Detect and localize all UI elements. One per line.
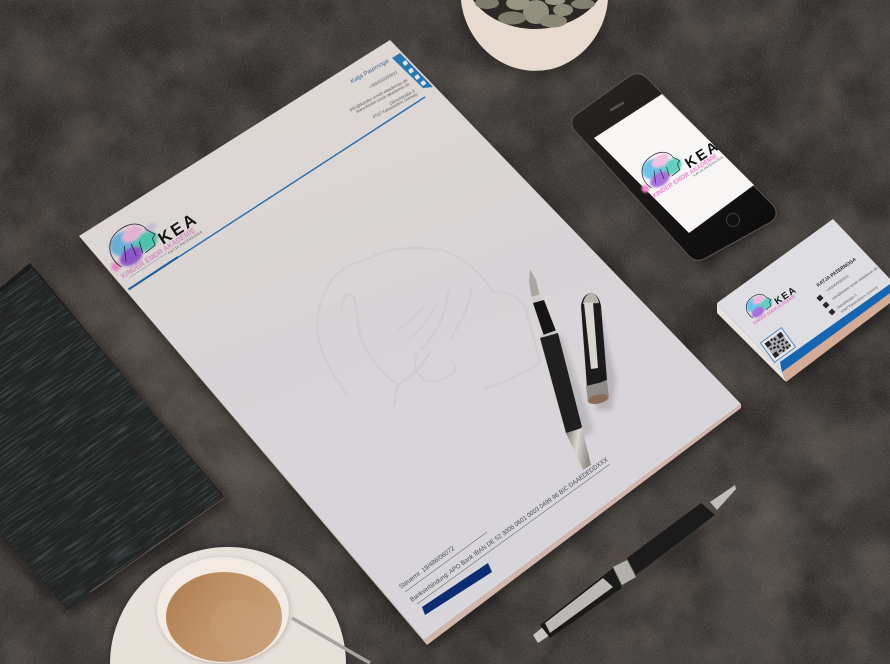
contact text block: [349, 58, 419, 119]
card side edge: [717, 303, 786, 382]
contact text block: +49160/0300021: [368, 69, 399, 90]
footer tax number: [398, 532, 487, 592]
contact text block: Katja Paternoga: [350, 58, 391, 85]
card QR code: [760, 328, 796, 362]
spoon: [292, 618, 370, 663]
lower barrel: [540, 568, 622, 638]
saucer: [108, 544, 348, 664]
black leather notebook: [0, 249, 230, 616]
card logo: [741, 275, 799, 325]
cap metal ring: [586, 381, 609, 404]
card logo KEA: KEA: [773, 285, 798, 307]
logo wordmark KEA: KEA: [155, 210, 199, 248]
paper shadow: [79, 60, 746, 650]
contact text block: info@kinder-emdr-akademie.de: [349, 77, 409, 112]
social tab top right: [392, 53, 433, 88]
card logo head: [742, 289, 776, 321]
card contact icons: [816, 294, 836, 316]
phone logo: [629, 123, 725, 206]
card contact text: info@kinder-emdr-akademie.de: [831, 266, 879, 301]
contact text block: www.kinder-emdr-akademie.de: [355, 81, 411, 114]
card stack salmon edge: [782, 293, 890, 382]
logo name: KINDER EMDR AKADEMIE: [119, 226, 197, 281]
upper barrel: [627, 503, 715, 575]
card contact text: Dieselstraße 3: [836, 293, 858, 310]
plant pot with succulent: [455, 0, 614, 78]
card contact text: 67657 Kaiserslautern, Germany: [840, 285, 879, 314]
card contact text: [816, 257, 879, 314]
ring: [613, 560, 636, 585]
collar ring: [540, 330, 558, 339]
earpiece: [611, 103, 623, 110]
card logo name: KINDER EMDR AKADEMIE: [752, 293, 796, 325]
logo thin underline: [129, 253, 167, 278]
smartphone: [572, 74, 782, 268]
pen cap: [581, 293, 616, 410]
nib: [529, 269, 540, 299]
metal cone: [710, 485, 736, 510]
tip: [533, 627, 550, 643]
card face: [717, 219, 890, 372]
cap clip: [584, 302, 598, 369]
business card stack: [716, 219, 890, 388]
contact text block: 67657 Kaiserslautern, Germany: [372, 91, 419, 119]
logo sub line: KATJA PATERNOGA: [167, 230, 203, 255]
letterhead logo: [96, 192, 204, 286]
barrel: [540, 333, 582, 433]
card contact text: +49160/0300021: [825, 274, 850, 293]
letterhead paper: [79, 40, 746, 650]
silver clip: [545, 578, 613, 633]
paper sheet: [79, 40, 741, 640]
header blue rule: [128, 97, 425, 290]
home button: [726, 214, 740, 226]
watermark: faint head outline: [317, 248, 540, 405]
contact text block: Dieselstraße 3: [389, 88, 416, 106]
phone logo head: [629, 144, 687, 196]
ballpoint pen: [533, 485, 736, 645]
footer navy bar: [422, 563, 492, 615]
phone logo KEA: KEA: [683, 139, 721, 172]
coffee cup: [157, 557, 291, 664]
paper edge: [79, 236, 741, 645]
fountain pen: [529, 269, 594, 470]
phone logo sub line: KATJA PATERNOGA: [693, 155, 725, 178]
grip section: [533, 300, 556, 336]
footer tax number: Steuernr. 19/486/06072: [398, 545, 456, 591]
metal end: [566, 428, 591, 470]
card contact text: KATJA PATERNOGA: [816, 257, 858, 289]
phone screen: [594, 94, 754, 233]
logo head artwork: [96, 211, 168, 276]
card blue band: [780, 284, 890, 372]
succulent leaves: [475, 0, 595, 28]
footer bank details: Bankverbindung: APO Bank IBAN DE 52 3006 0601 0003 0499 96 BIC DAAEDEDDXXX: [409, 456, 610, 604]
phone body: [572, 74, 776, 260]
phone logo name: KINDER EMDR AKADEMIE: [652, 153, 719, 200]
